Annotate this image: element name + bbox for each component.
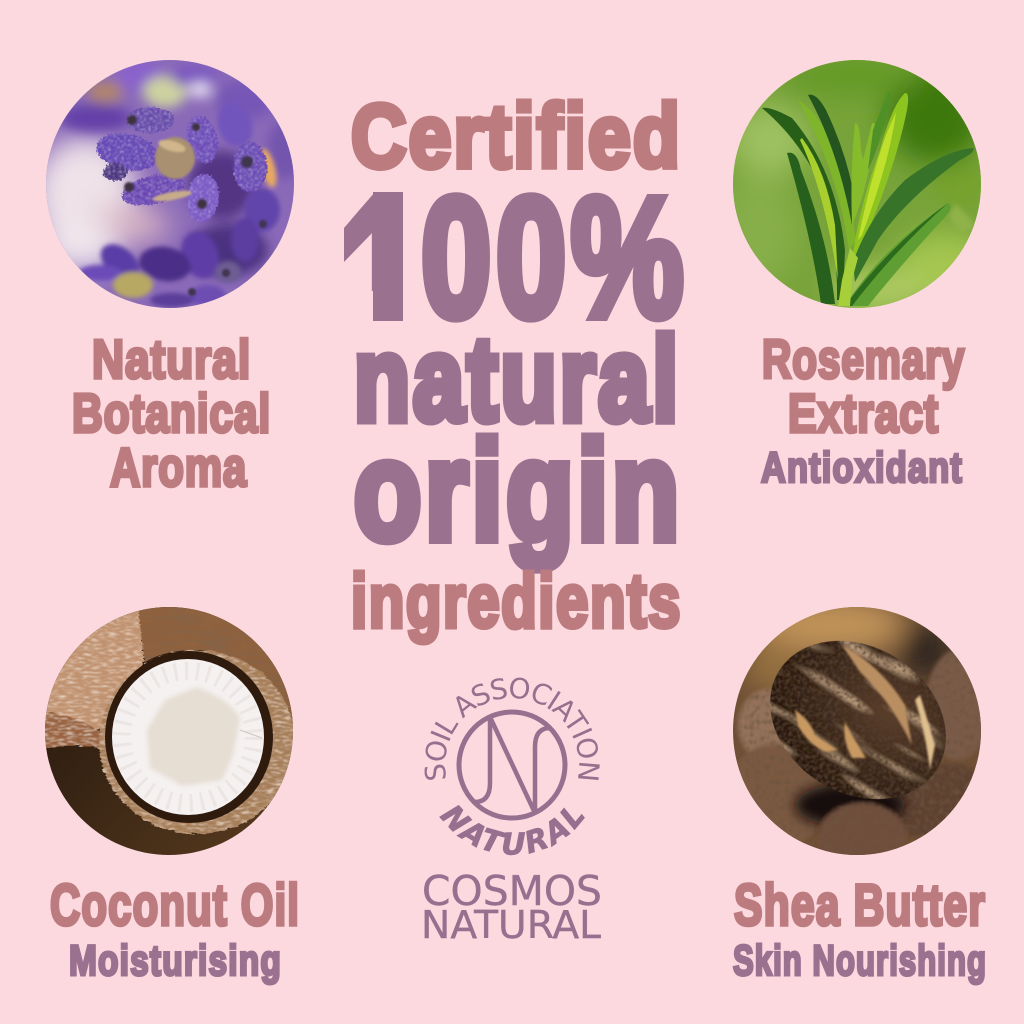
- label: Natural Botanical Aroma: [72, 328, 271, 498]
- lavender calyx and bud tips: [124, 115, 267, 296]
- label: Natural Botanical Aroma: Natural: [92, 328, 251, 390]
- coconut husk pieces: [45, 607, 293, 749]
- photo: coconut: [45, 607, 293, 855]
- label: Rosemary Extract Antioxidant: Antioxidant: [761, 444, 963, 492]
- label: Natural Botanical Aroma: Aroma: [110, 436, 247, 498]
- heading line: ingredients: ingredients: [351, 559, 682, 644]
- logo arc text: SOIL ASSOCIATION: [424, 678, 600, 780]
- shea main nut: [770, 640, 946, 800]
- label: Rosemary Extract Antioxidant: Extract: [788, 382, 939, 444]
- label: Coconut Oil Moisturising: Moisturising: [69, 937, 282, 985]
- label: Coconut Oil Moisturising: [50, 873, 300, 985]
- heading line: Certified: Certified: [351, 87, 682, 187]
- heading: Certified 100% natural origin ingredients: [342, 87, 688, 644]
- lavender main buds: [93, 107, 267, 224]
- label: Coconut Oil Moisturising: Coconut Oil: [50, 873, 300, 938]
- text: COSMOS NATURAL: COSMOS: [422, 867, 602, 915]
- shea background nuts: [736, 650, 981, 843]
- photo: shea butter nuts: [733, 607, 981, 855]
- photo: rosemary: [733, 60, 981, 308]
- photo: lavender: [46, 60, 294, 308]
- logo ring: [459, 712, 565, 818]
- label: Natural Botanical Aroma: Botanical: [72, 382, 271, 444]
- logo natural arc: NATURAL: [439, 805, 585, 856]
- label: Rosemary Extract Antioxidant: [761, 328, 965, 492]
- logo: Soil Association Natural: [424, 678, 600, 856]
- coconut half: [99, 650, 295, 834]
- rosemary leaves: [762, 92, 976, 306]
- text: COSMOS NATURAL: NATURAL: [421, 903, 601, 947]
- heading line: origin: origin: [354, 412, 683, 569]
- heading line: natural: natural: [354, 313, 681, 446]
- text: COSMOS NATURAL: [421, 867, 602, 947]
- logo N monogram: [475, 717, 550, 813]
- label: Shea Butter Skin Nourishing: [733, 873, 987, 985]
- heading line: 100%: 100%: [346, 163, 688, 353]
